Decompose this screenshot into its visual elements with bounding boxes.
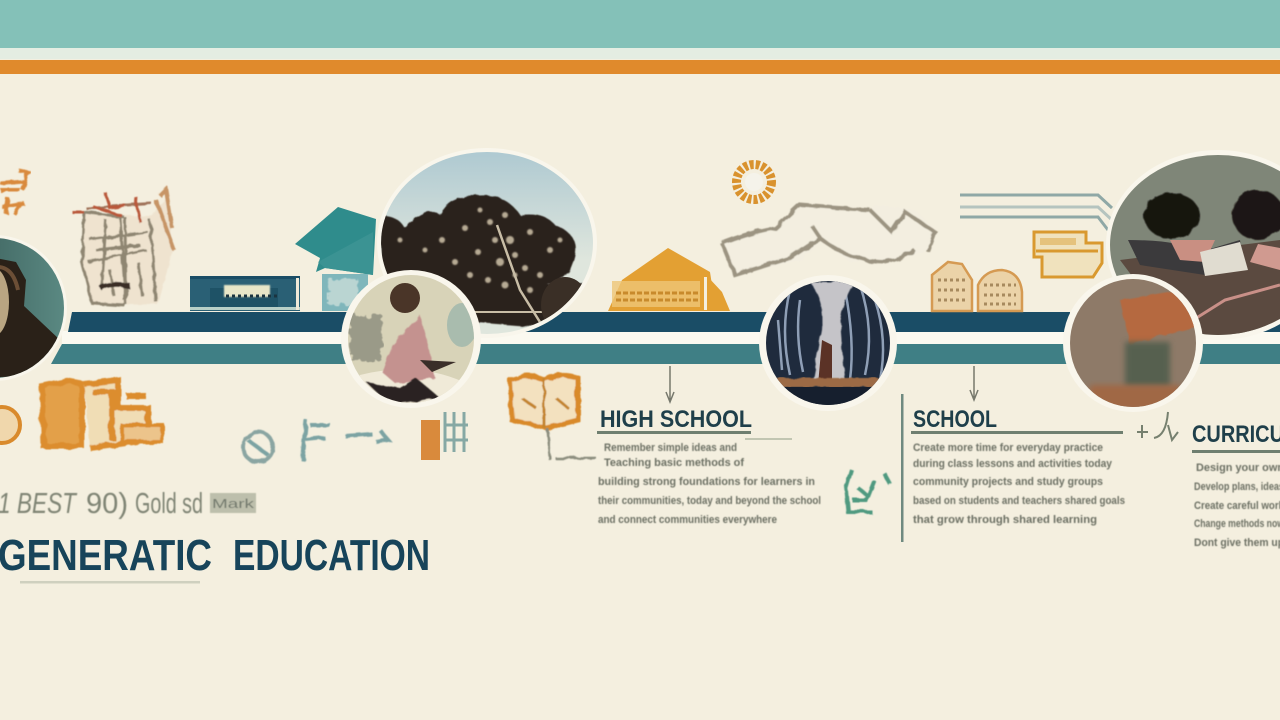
section text 2: Create more time for everyday practice (913, 442, 1103, 454)
icon: orange books (42, 380, 162, 448)
icon: teal roof (295, 207, 376, 311)
icon: small sprig (1137, 412, 1178, 440)
circle: left portrait (0, 236, 67, 380)
icon: orange glyph top left (0, 170, 28, 214)
caption rule under title (20, 581, 200, 584)
vertical divider (901, 394, 904, 542)
main title: EDUCATION (233, 531, 430, 580)
circle: copper rock photo (1063, 274, 1205, 415)
circle: child photo (340, 270, 481, 410)
section text 2: based on students and teachers shared goals (913, 495, 1125, 507)
section text 2: community projects and study groups (913, 476, 1103, 488)
section text 2 (913, 442, 1125, 526)
icon: orange ring (736, 164, 772, 200)
icon: grey-teal striped lines (960, 195, 1112, 230)
main title (0, 531, 430, 580)
subtitle line: 1 BEST (0, 488, 78, 520)
icon: orange open book with stand (510, 375, 596, 460)
icon: sketched face building (72, 190, 174, 305)
section text 2: during class lessons and activities today (913, 458, 1113, 470)
icon: green leaf badge (846, 470, 890, 512)
circle: right group photo (1100, 150, 1280, 340)
icon: orange half circle (0, 407, 20, 443)
section text 1 (598, 442, 821, 526)
timeline bars (51, 312, 1280, 364)
section heading 2 (911, 406, 1123, 434)
section text 1: Teaching basic methods of (604, 457, 744, 469)
connector arrow 2 (970, 366, 978, 400)
icon: sketched open book outline (722, 205, 935, 275)
icon: school block (190, 276, 300, 311)
section text 1: building strong foundations for learners in (598, 476, 815, 488)
subtitle line: 90) (86, 488, 128, 520)
section text 1: and connect communities everywhere (598, 514, 777, 526)
subtitle line (0, 488, 256, 520)
section heading 1: HIGH SCHOOL (600, 406, 752, 433)
icon: twin orange huts (932, 262, 1022, 311)
section text 3 (1194, 462, 1280, 549)
subtitle line: Gold sd (135, 488, 203, 520)
subtitle line: Mark (212, 496, 255, 511)
section heading 1 (597, 406, 792, 440)
icon: teal and grey glyphs (243, 420, 388, 462)
top teal band (0, 0, 1280, 59)
circle: waterfall photo (759, 275, 900, 412)
orange rule (0, 60, 1280, 74)
icon: orange stamp card (1034, 232, 1102, 277)
section text 1: their communities, today and beyond the school (598, 495, 821, 507)
section text 2: that grow through shared learning (913, 514, 1097, 526)
circle: tree photo (377, 148, 597, 334)
section heading 2: SCHOOL (913, 406, 997, 433)
section text 1: Remember simple ideas and (604, 442, 737, 454)
main title: GENERATIC (0, 531, 212, 580)
icon: orange roof building (608, 248, 730, 311)
icon: orange and teal tag (421, 412, 468, 460)
connector arrow 1 (666, 366, 674, 402)
